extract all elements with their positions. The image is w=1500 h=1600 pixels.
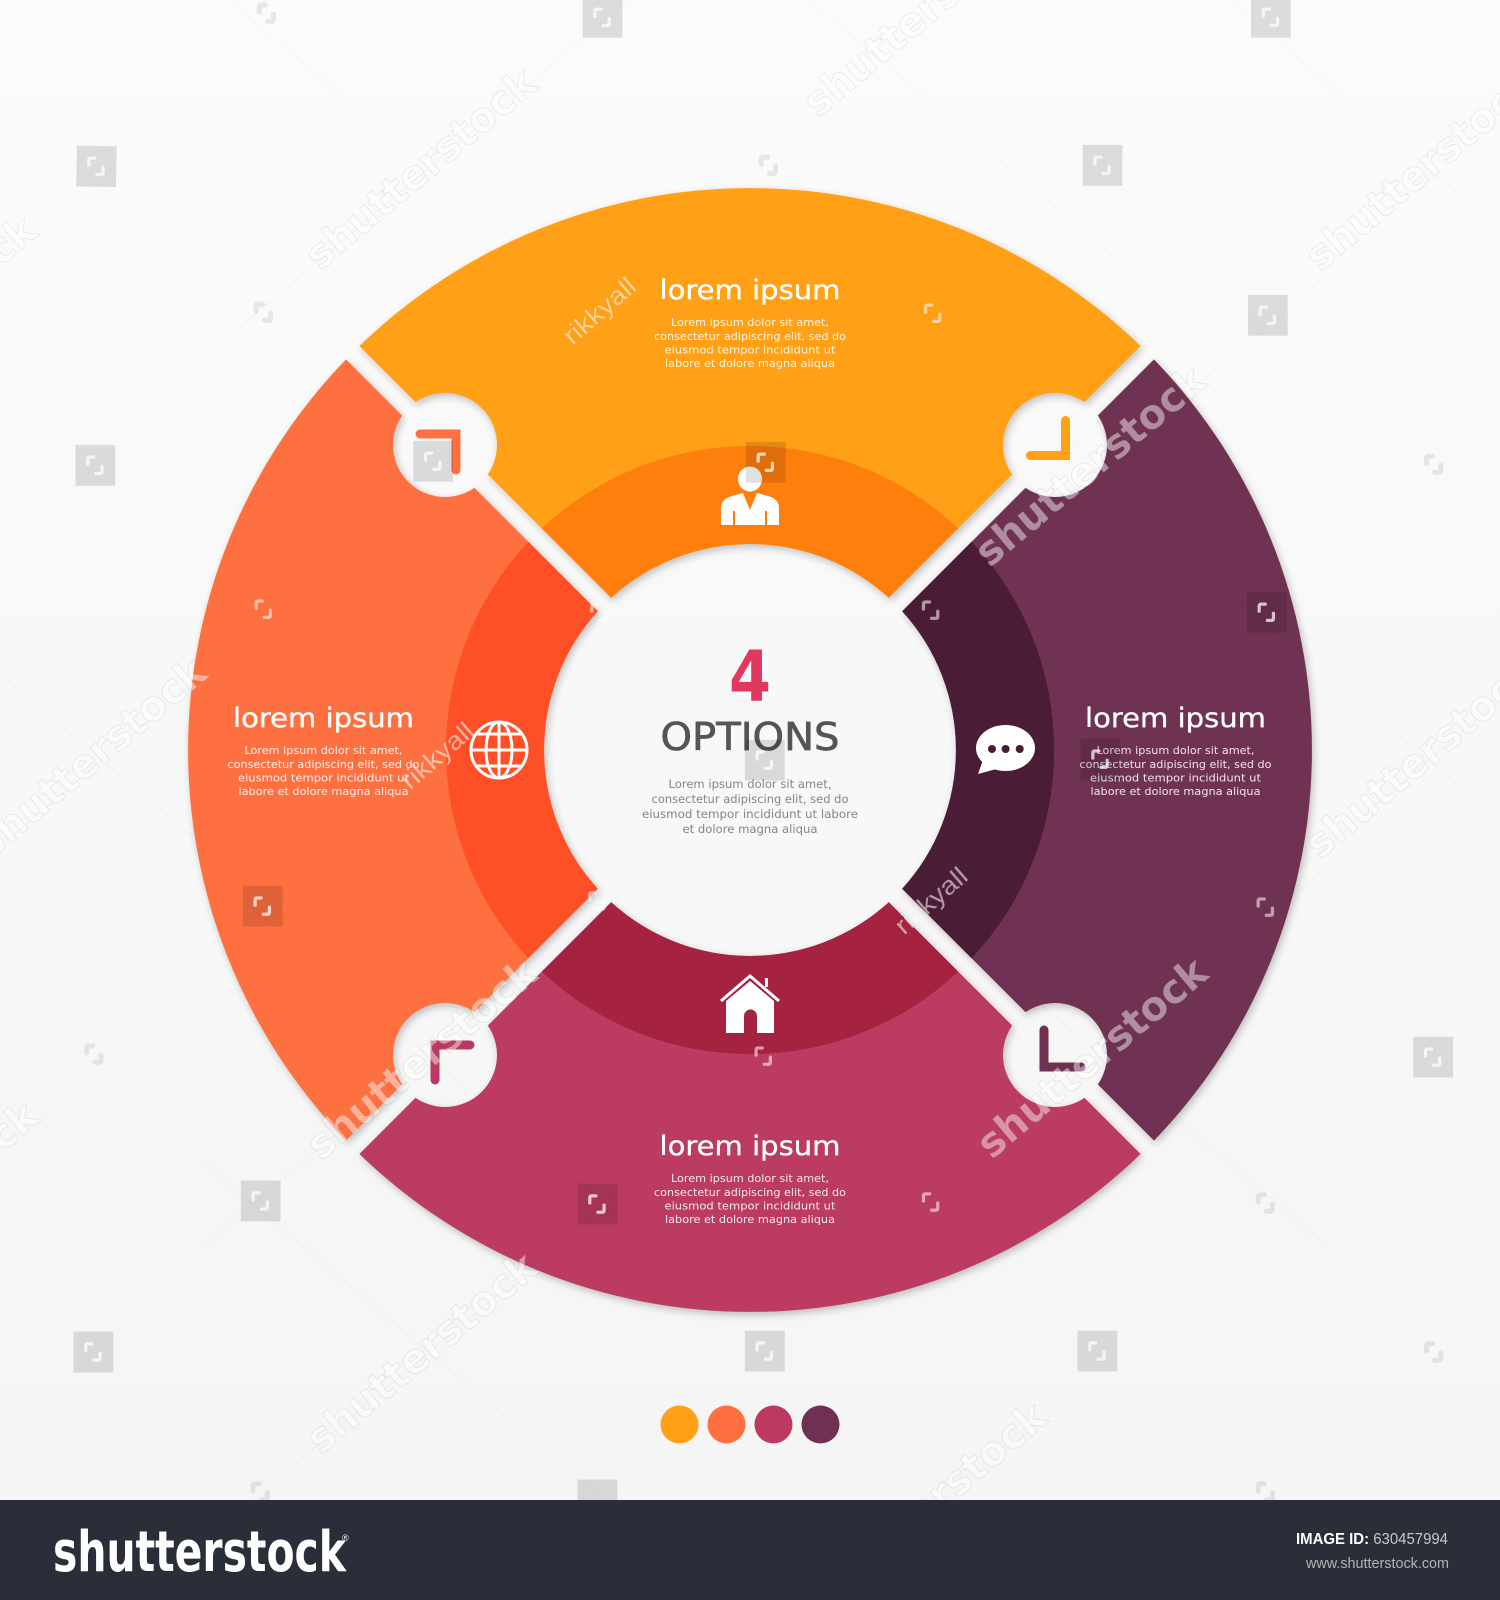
- text block: top segment: labore et dolore magna aliqua: [665, 358, 835, 370]
- icon: house: [721, 976, 779, 1033]
- icon: corner arrow bottom-left: [435, 1045, 470, 1080]
- text block: bottom segment: Lorem ipsum dolor sit amet,: [671, 1173, 829, 1185]
- watermark overlay: shutterstock: [967, 947, 1218, 1168]
- footer bar: [0, 1500, 1500, 1600]
- footer image id: IMAGE ID: 630457994: [1296, 1531, 1448, 1548]
- watermark overlay: shutterstock: [296, 58, 546, 279]
- text block: right segment: Lorem ipsum dolor sit amet,: [1096, 745, 1254, 757]
- center description: eiusmod tempor incididunt ut labore: [642, 807, 858, 821]
- text block: bottom segment: labore et dolore magna aliqua: [665, 1214, 835, 1226]
- text block: left segment: Lorem ipsum dolor sit amet,: [244, 745, 402, 757]
- icon: speech bubble: [976, 725, 1035, 774]
- watermark overlay: rikkyall: [558, 272, 642, 350]
- text block: top segment: eiusmod tempor incididunt ut: [664, 344, 836, 356]
- text block: left segment: labore et dolore magna aliqua: [238, 786, 408, 798]
- footer url: www.shutterstock.com: [1305, 1555, 1449, 1572]
- watermark overlay: shutterstock: [297, 1242, 547, 1463]
- text block: right segment: lorem ipsum: [1085, 703, 1266, 734]
- footer logo: shutterstock: [53, 1520, 347, 1585]
- watermark overlay: shutterstock: [965, 355, 1215, 576]
- center: title and description: [642, 636, 858, 836]
- segment: left coral: [188, 359, 598, 1141]
- watermark overlay: rikkyall: [396, 717, 480, 795]
- text block: bottom segment: eiusmod tempor incididunt ut: [664, 1200, 836, 1212]
- text block: bottom segment: lorem ipsum: [660, 1131, 840, 1162]
- circular chart: four segments: [188, 188, 1312, 1312]
- icon: corner arrow top-right: [1030, 420, 1066, 456]
- segment: top orange: [359, 188, 1141, 598]
- icon: person: [721, 466, 779, 525]
- icon: corner arrow top-left: [420, 434, 456, 470]
- text block: right segment: [1080, 703, 1272, 798]
- icon: globe: [471, 722, 527, 778]
- text block: bottom segment: consectetur adipiscing elit, sed do: [654, 1187, 846, 1199]
- watermark overlay: rikkyall: [890, 862, 973, 940]
- center description: Lorem ipsum dolor sit amet,: [668, 777, 832, 791]
- center description: consectetur adipiscing elit, sed do: [652, 792, 848, 806]
- text block: right segment: labore et dolore magna aliqua: [1090, 786, 1260, 798]
- text block: left segment: eiusmod tempor incididunt ut: [238, 772, 409, 784]
- segment: right purple: [902, 359, 1312, 1141]
- legend dots: [660, 1406, 840, 1444]
- watermark overlay: shutterstock: [297, 948, 547, 1169]
- text block: top segment: lorem ipsum: [660, 275, 840, 306]
- center description: et dolore magna aliqua: [682, 822, 818, 836]
- footer registered mark: ®: [342, 1533, 349, 1543]
- text block: left segment: consectetur adipiscing elit, sed do: [228, 759, 420, 771]
- text block: bottom segment: [654, 1131, 846, 1226]
- text block: top segment: consectetur adipiscing elit, sed do: [654, 331, 846, 343]
- center number: 4: [729, 636, 771, 718]
- center description: [642, 777, 858, 836]
- icon: corner arrow bottom-right: [1044, 1030, 1081, 1067]
- text block: right segment: eiusmod tempor incididunt ut: [1090, 772, 1261, 784]
- segment: bottom crimson: [359, 902, 1141, 1312]
- text block: top segment: Lorem ipsum dolor sit amet,: [671, 317, 829, 329]
- text block: left segment: lorem ipsum: [233, 703, 414, 734]
- center heading: OPTIONS: [660, 715, 840, 759]
- text block: top segment: [654, 275, 846, 370]
- text block: right segment: consectetur adipiscing elit, sed do: [1080, 759, 1272, 771]
- text block: left segment: [228, 703, 420, 798]
